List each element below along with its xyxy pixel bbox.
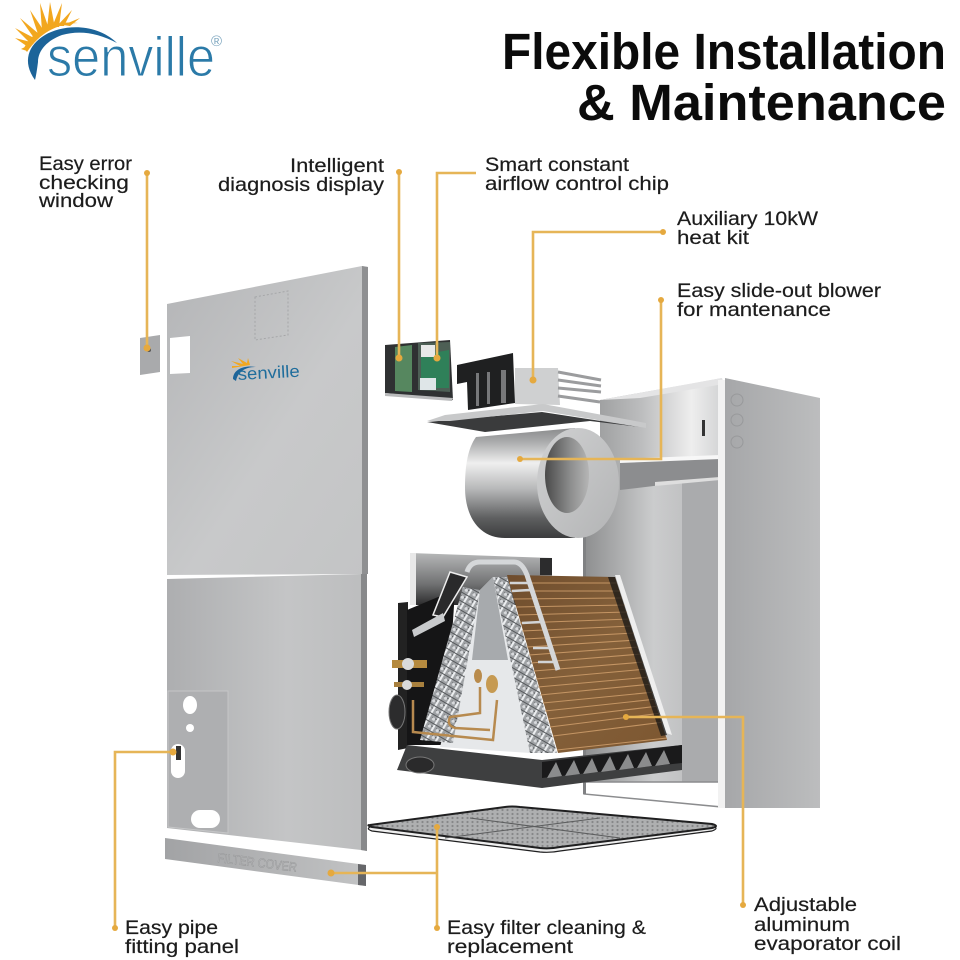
label: easy filter cleaning and replacement: replacement	[447, 936, 574, 958]
filter cover: FILTER COVER	[217, 850, 298, 875]
leader: intelligent diagnosis display	[396, 169, 402, 362]
panel logo: senville	[237, 362, 300, 384]
leader: auxiliary heat kit	[530, 229, 666, 384]
label: easy error checking window: window	[38, 190, 114, 212]
label: easy error checking window	[38, 153, 133, 212]
leader: easy error checking window	[144, 170, 150, 352]
label: intelligent diagnosis display	[218, 155, 385, 196]
lower front panel	[167, 574, 367, 851]
wordmark: senville	[47, 25, 215, 88]
label: intelligent diagnosis display: Intelligent	[290, 155, 385, 177]
copper fin face	[507, 575, 672, 753]
label: intelligent diagnosis display: diagnosis display	[218, 174, 384, 196]
copper pipes	[413, 687, 497, 740]
label: easy error checking window: checking	[39, 172, 129, 194]
blower	[465, 428, 619, 538]
open bottom frame	[584, 782, 722, 807]
label: easy pipe fitting panel: Easy pipe	[125, 917, 218, 939]
label: easy slide-out blower: Easy slide-out blower	[677, 280, 882, 302]
logo: Senville	[15, 2, 222, 88]
icon: sun rays	[15, 2, 80, 52]
label: easy slide-out blower	[677, 280, 882, 321]
swoosh	[28, 27, 117, 80]
label: adjustable aluminum evaporator coil: evaporator coil	[754, 933, 901, 955]
evaporator coil	[389, 553, 682, 788]
silver A-frame with tubing	[412, 562, 558, 753]
label: adjustable aluminum evaporator coil: Adjustable	[754, 894, 857, 916]
leader: evaporator coil	[623, 714, 746, 908]
label: auxiliary heat kit: Auxiliary 10kW	[677, 208, 819, 230]
filter	[368, 806, 716, 852]
title: & Maintenance	[577, 74, 946, 131]
leader: smart airflow chip	[434, 173, 476, 362]
label: easy slide-out blower: for mantenance	[677, 299, 831, 321]
label: easy error checking window: Easy error	[39, 153, 133, 175]
error checking window cover	[140, 335, 160, 375]
control box with circuit boards	[385, 340, 453, 401]
label: smart constant airflow control chip	[485, 154, 669, 195]
title	[502, 23, 946, 131]
label: adjustable aluminum evaporator coil	[754, 894, 901, 955]
leader: filter cleaning	[328, 824, 440, 931]
leader: pipe fitting panel	[112, 748, 176, 931]
pipe fitting panel	[168, 691, 228, 833]
label: smart constant airflow control chip: Smart constant	[485, 154, 630, 176]
leader: slide-out blower	[517, 297, 664, 462]
label: easy pipe fitting panel	[125, 917, 239, 958]
shelf	[620, 458, 720, 490]
label: smart constant airflow control chip: airflow control chip	[485, 173, 669, 195]
label: auxiliary heat kit: heat kit	[677, 227, 750, 249]
mounting bracket	[389, 590, 455, 750]
drain pan	[397, 745, 682, 788]
label: easy pipe fitting panel: fitting panel	[125, 936, 239, 958]
heat kit	[457, 353, 601, 410]
cabinet	[583, 378, 820, 808]
mounting plate	[427, 404, 646, 432]
label: easy filter cleaning and replacement	[447, 917, 646, 958]
filter cover	[165, 838, 366, 886]
label: auxiliary heat kit	[677, 208, 819, 249]
label: adjustable aluminum evaporator coil: aluminum	[754, 914, 850, 936]
label: easy filter cleaning and replacement: Easy filter cleaning &	[447, 917, 646, 939]
registered mark: ®	[211, 33, 222, 50]
upper front panel	[167, 266, 368, 575]
brass fittings	[392, 658, 427, 690]
